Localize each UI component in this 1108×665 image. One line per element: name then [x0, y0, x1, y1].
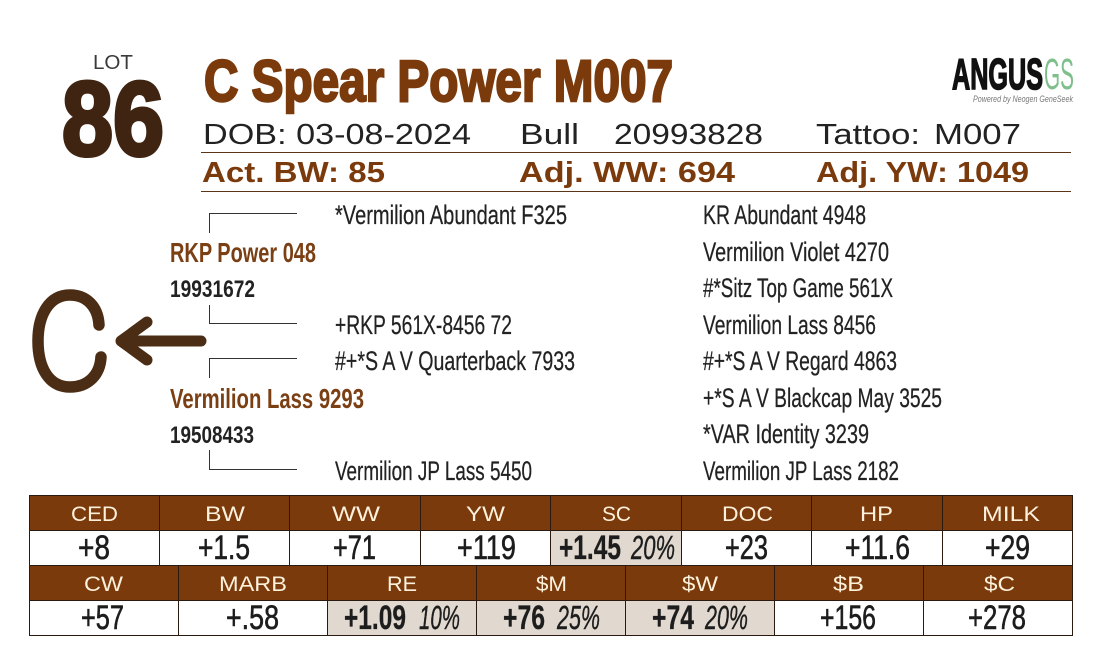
table row 1 values: +1.5	[198, 529, 250, 567]
weights row: Adj. YW: 1049	[816, 157, 1029, 189]
animal details row: Bull	[520, 119, 579, 151]
lot label: LOT	[93, 52, 133, 74]
table row 1 values: +23	[725, 529, 768, 567]
table row 2 headers: MARB	[219, 573, 287, 596]
table row 2 values	[81, 599, 1026, 637]
table row 1 values: +71	[333, 529, 376, 567]
table row 2 values: 20%	[704, 599, 748, 636]
table row 1 headers: MILK	[982, 503, 1040, 526]
animal details row: Tattoo:	[816, 119, 920, 151]
table row 2 headers: RE	[387, 573, 417, 596]
table row 1 values: +1.45	[559, 529, 621, 567]
pedigree brackets	[210, 214, 297, 470]
table row 2 values: 25%	[556, 599, 600, 636]
table row 2 values: +57	[81, 599, 124, 637]
pedigree: great-grandparents: Vermilion Violet 4270	[703, 237, 889, 267]
table row 2 values: +.58	[226, 599, 279, 637]
table row 1 headers: BW	[205, 503, 245, 526]
pedigree: great-grandparents: *VAR Identity 3239	[703, 419, 869, 449]
pedigree: great-grandparents	[703, 200, 942, 486]
pedigree: great-grandparents: Vermilion JP Lass 2182	[703, 456, 899, 486]
pedigree: great-grandparents: #*Sitz Top Game 561X	[703, 273, 893, 303]
table row 1 values	[78, 529, 1030, 567]
logo: AngusGS: Powered by Neogen GeneSeek	[973, 94, 1073, 104]
pedigree: sire and dam: RKP Power 048	[170, 237, 316, 268]
weights row: Act. BW: 85	[202, 157, 385, 189]
icon: C with arrow	[38, 295, 201, 387]
table row 2 values: +278	[968, 599, 1026, 637]
pedigree: great-grandparents: KR Abundant 4948	[703, 200, 866, 230]
weights row	[202, 157, 1029, 189]
pedigree: sire and dam: 19931672	[170, 276, 255, 303]
pedigree: sire and dam: Vermilion Lass 9293	[170, 383, 364, 414]
table row 2 headers: CW	[84, 573, 123, 596]
pedigree: great-grandparents: +*S A V Blackcap May 3525	[703, 383, 942, 413]
table row 1 headers: DOC	[722, 503, 773, 526]
table row 2 headers: $M	[536, 573, 567, 596]
table row 2 headers: $C	[984, 573, 1015, 596]
table row 2 values: +1.09	[344, 599, 406, 637]
table row 2 values: 10%	[419, 599, 460, 636]
table row 1 headers: SC	[602, 503, 631, 526]
lot number: 86	[62, 61, 164, 178]
table row 1 values: 20%	[630, 529, 675, 566]
animal details row	[203, 119, 1021, 151]
weights row: Adj. WW: 694	[519, 157, 735, 189]
table row 2 headers: $W	[682, 573, 718, 596]
table row 1 values: +8	[78, 529, 110, 567]
table row 2 values: +76	[503, 599, 545, 637]
pedigree: sire and dam	[170, 237, 364, 449]
EPD table	[29, 496, 1072, 637]
pedigree: great-grandparents: #+*S A V Regard 4863	[703, 346, 897, 376]
pedigree: grandparents: +RKP 561X-8456 72	[335, 310, 512, 340]
pedigree: great-grandparents: Vermilion Lass 8456	[703, 310, 876, 340]
table row 1 headers: WW	[332, 503, 380, 526]
table row 2 headers: $B	[833, 573, 864, 596]
table row 1 values: +119	[457, 529, 516, 567]
pedigree: grandparents: Vermilion JP Lass 5450	[335, 456, 532, 486]
pedigree: sire and dam: 19508433	[170, 422, 254, 449]
animal details row: M007	[934, 119, 1021, 151]
table row 1 values: +29	[985, 529, 1030, 567]
table row 2 values: +156	[820, 599, 876, 637]
table row 1 headers	[71, 503, 1040, 526]
table row 2 values: +74	[652, 599, 694, 637]
pedigree: grandparents: #+*S A V Quarterback 7933	[335, 346, 575, 376]
title: C Spear Power M007	[204, 49, 673, 114]
table row 1 values: +11.6	[845, 529, 910, 567]
pedigree: grandparents	[335, 200, 575, 486]
table row 2 headers	[84, 573, 1015, 596]
lot card: GS	[1044, 50, 1074, 99]
pedigree: grandparents: *Vermilion Abundant F325	[335, 200, 567, 230]
animal details row: 20993828	[614, 119, 763, 151]
logo: AngusGS: ANGUS	[952, 50, 1043, 99]
table row 1 headers: HP	[860, 503, 893, 526]
animal details row: DOB: 03-08-2024	[203, 119, 471, 151]
table row 1 headers: CED	[71, 503, 118, 526]
table row 1 headers: YW	[466, 503, 505, 526]
